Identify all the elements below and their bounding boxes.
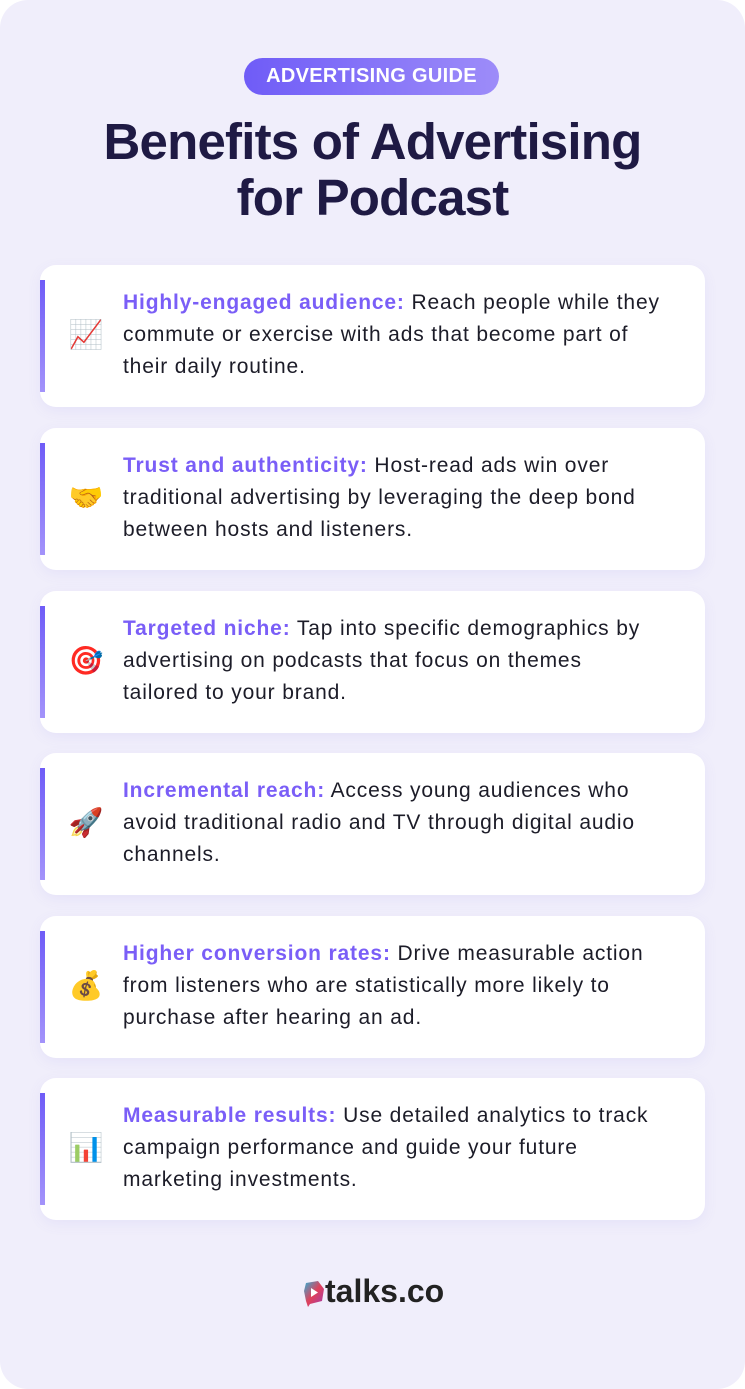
icon: bar chart: 📊 [69,1131,103,1164]
card: incremental reach [40,753,705,895]
text: conversion: purchase after hearing an ad. [123,1006,422,1029]
card: targeted niche [40,591,705,733]
card: highly-engaged audience [40,265,705,407]
text: highly-engaged audience: their daily routine. [123,355,306,378]
text: highly-engaged audience: commute or exercise with ads that become part of [123,323,628,346]
text: trust: traditional advertising by leveraging the deep bond [123,486,636,509]
text: highly-engaged audience: Highly-engaged audience: Reach people while they [123,291,660,314]
text: incremental reach [123,779,635,866]
text: incremental reach: channels. [123,843,221,866]
icon: target: 🎯 [69,644,103,677]
badge: advertising guide: ADVERTISING GUIDE [266,65,477,87]
text: incremental reach: avoid traditional radio and TV through digital audio [123,811,635,834]
text: targeted niche [123,617,640,704]
icon: chart up: 📈 [69,318,103,351]
icon: handshake: 🤝 [69,481,103,514]
text: measurable results: Measurable results: Use detailed analytics to track [123,1104,648,1127]
card: measurable results [40,1078,705,1220]
text: incremental reach: Incremental reach: Access young audiences who [123,779,629,802]
text: trust: Trust and authenticity: Host-read ads win over [123,454,609,477]
text: trust [123,454,636,541]
title: for Podcast [237,169,508,226]
text: measurable results [123,1104,648,1191]
text: measurable results: marketing investments. [123,1168,358,1191]
text: conversion [123,942,643,1029]
text: trust: between hosts and listeners. [123,518,413,541]
text: measurable results: campaign performance and guide your future [123,1136,578,1159]
logo: talks.co: talks.co [325,1273,444,1309]
card: trust and authenticity [40,428,705,570]
text: conversion: Higher conversion rates: Drive measurable action [123,942,643,965]
text: targeted niche: advertising on podcasts that focus on themes [123,649,582,672]
badge: advertising guide [244,58,499,95]
text: highly-engaged audience [123,291,660,378]
title [104,113,641,226]
icon: money bag: 💰 [69,969,103,1002]
icon: rocket: 🚀 [69,806,103,839]
title: Benefits of Advertising [104,113,641,170]
text: targeted niche: Targeted niche: Tap into specific demographics by [123,617,640,640]
text: targeted niche: tailored to your brand. [123,681,347,704]
card: higher conversion rates [40,916,705,1058]
text: conversion: from listeners who are statistically more likely to [123,974,610,997]
